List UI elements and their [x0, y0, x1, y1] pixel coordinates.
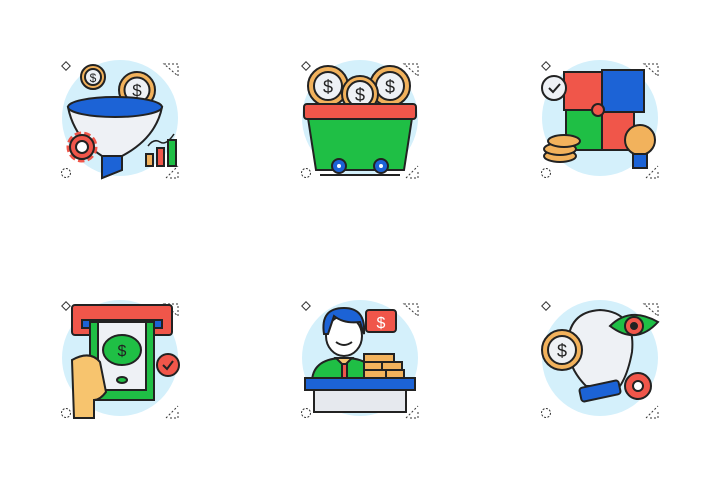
funnel	[68, 107, 162, 178]
icon: idea vision: $	[557, 341, 567, 361]
icon: sales funnel	[62, 60, 178, 178]
icon: coin cart	[302, 60, 418, 178]
icon: idea vision	[542, 300, 658, 418]
coins	[81, 65, 155, 108]
icon: ATM cash withdrawal	[62, 300, 179, 418]
icon: businessman at desk: $	[377, 315, 386, 332]
icon: coin cart: $	[385, 77, 395, 97]
icon: sales funnel: $	[132, 81, 142, 100]
icon: coin cart: $	[355, 85, 365, 105]
icon: ATM cash withdrawal: $	[118, 343, 127, 360]
icon: puzzle strategy	[542, 60, 658, 178]
icon: coin cart: $	[323, 77, 333, 97]
icon: sales funnel: $	[90, 71, 97, 85]
icon: businessman at desk	[302, 300, 418, 418]
gear	[69, 134, 95, 160]
bar chart	[146, 134, 176, 166]
